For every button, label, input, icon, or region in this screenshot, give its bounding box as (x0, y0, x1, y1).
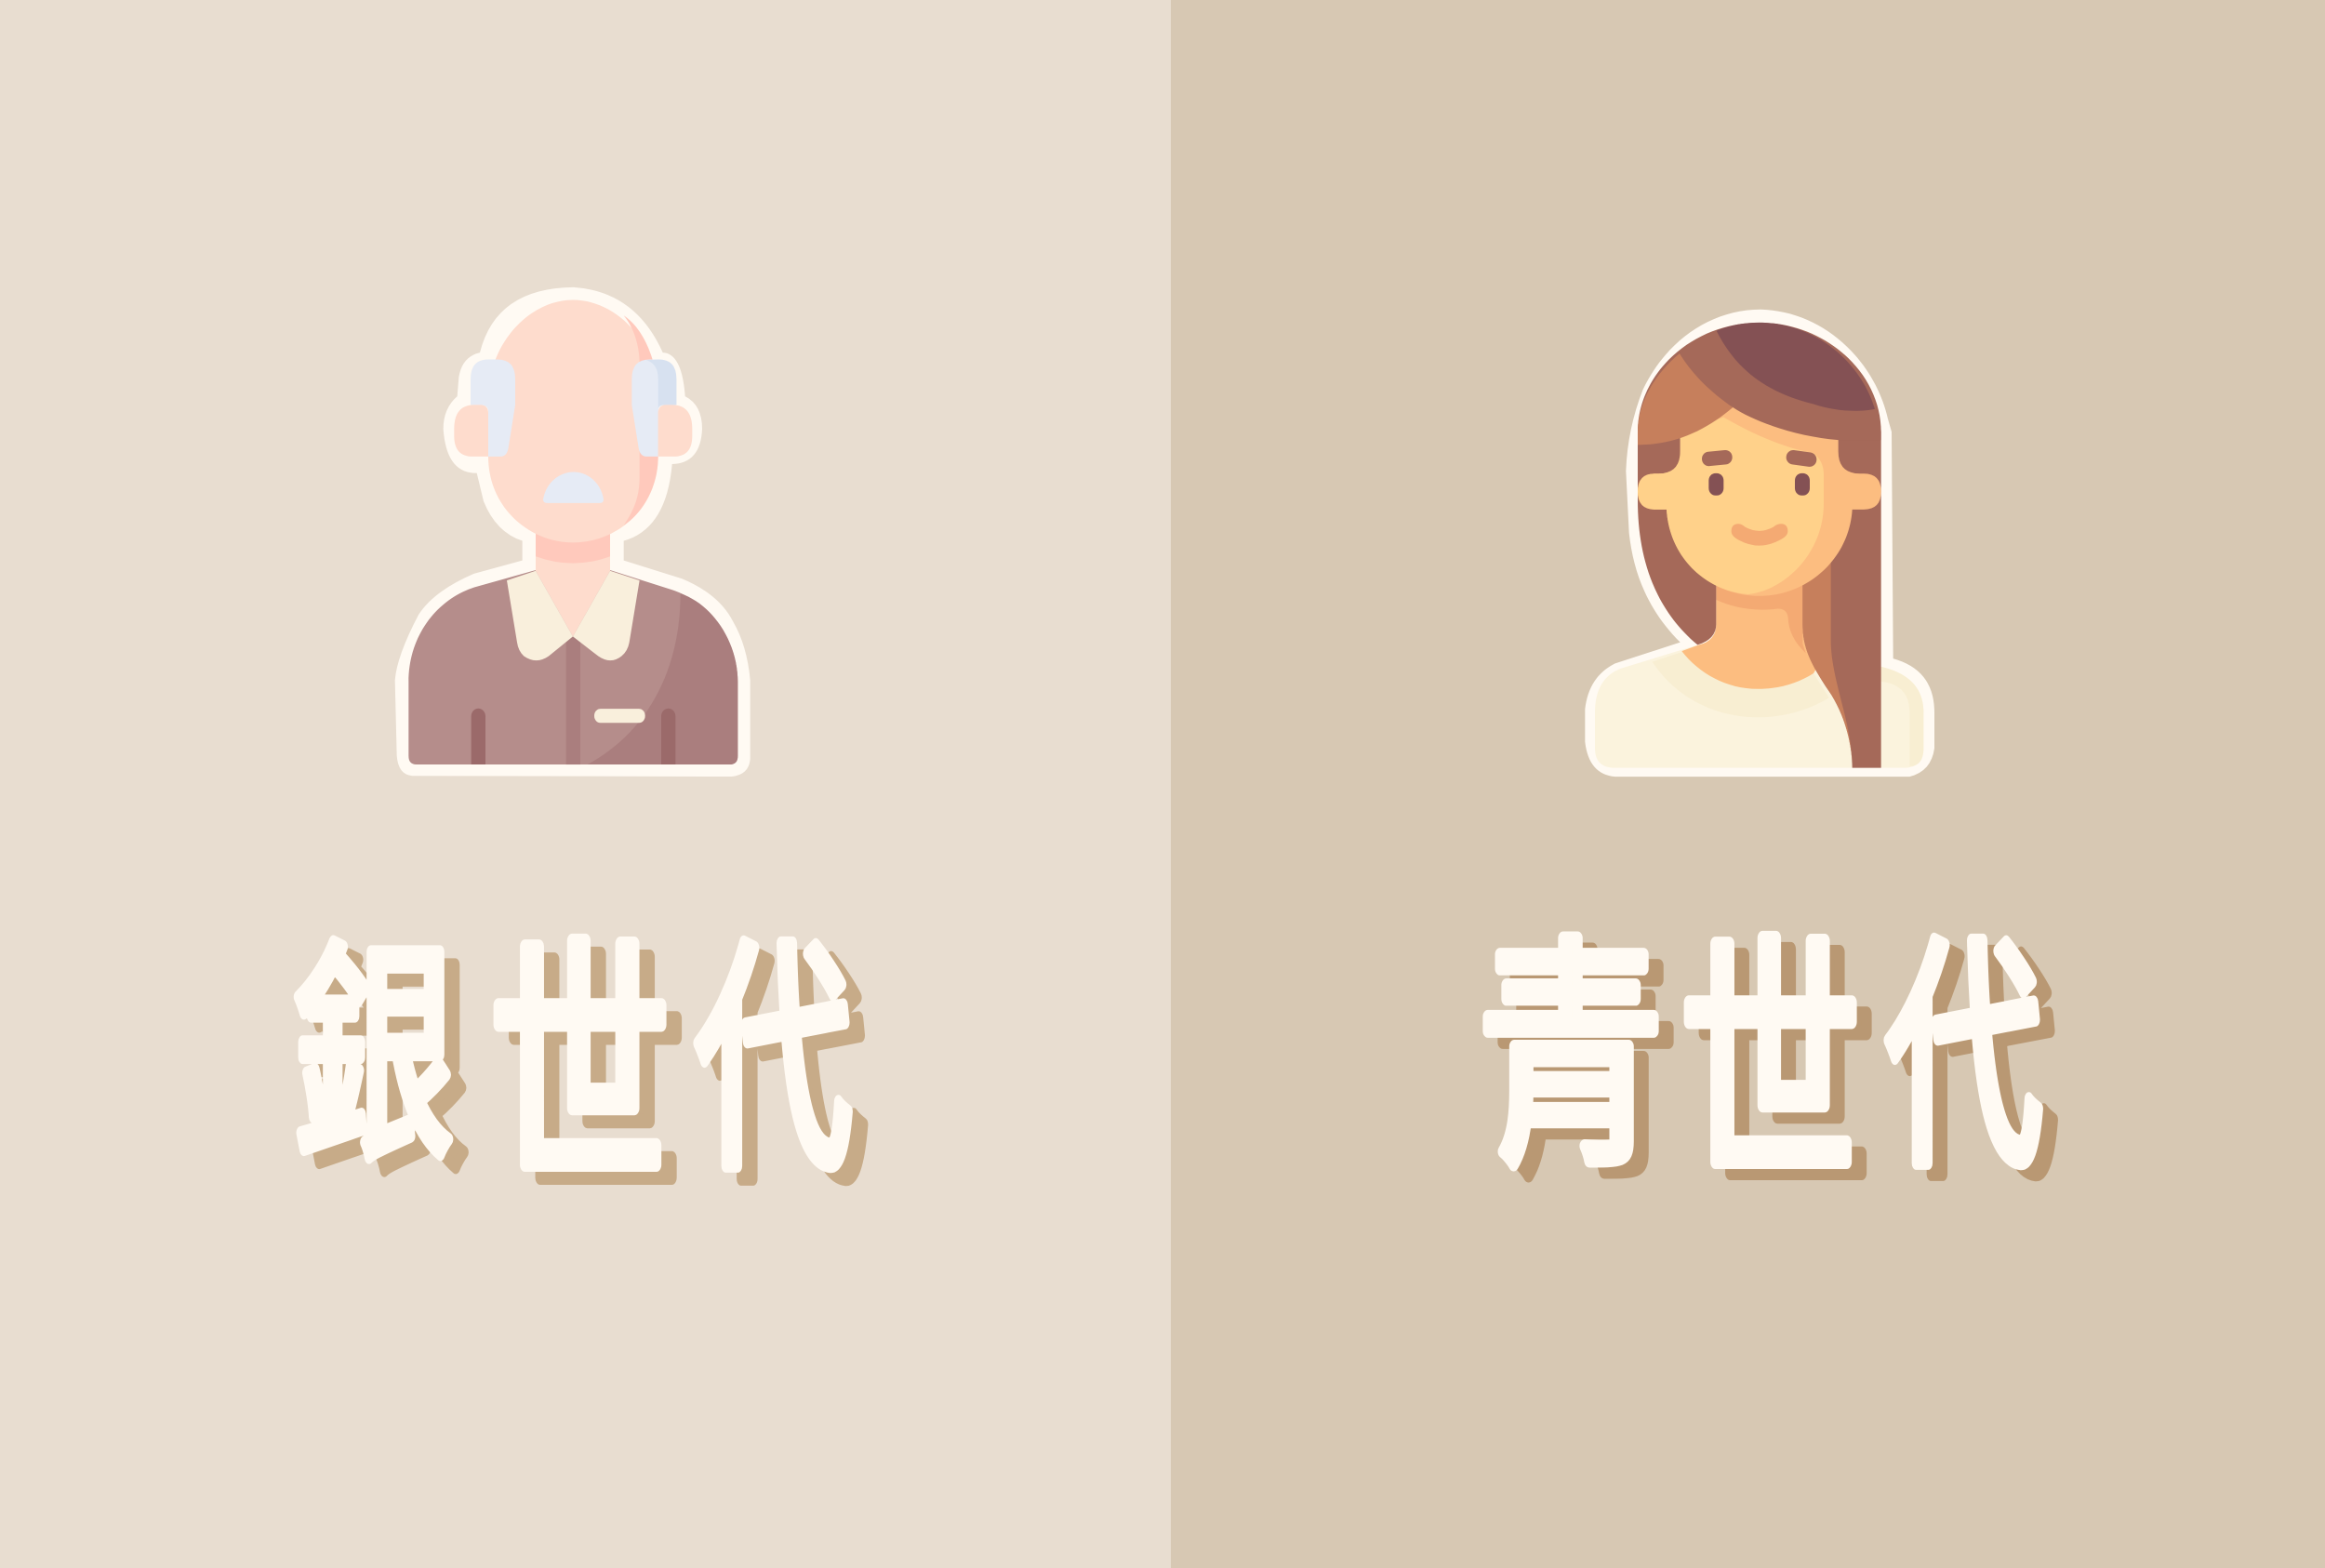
face (1638, 403, 1881, 596)
collar (507, 571, 573, 660)
shirt (1595, 645, 1923, 768)
heading shadow: 青 (1492, 935, 1680, 1205)
heading shadow: 世 (504, 937, 685, 1230)
heading text (1477, 921, 2042, 1215)
heading text: 世 (489, 924, 671, 1217)
head (488, 300, 658, 542)
hair (471, 360, 515, 457)
panel: right background (1171, 0, 2325, 1568)
heading shadow: 銀 (309, 939, 470, 1202)
sticker outline (1585, 310, 1934, 777)
ears (454, 405, 488, 457)
heading: silver generation (293, 924, 868, 1230)
mouth (1732, 524, 1787, 546)
name badge (594, 709, 645, 723)
heading text (293, 924, 852, 1217)
heading text: 青 (1477, 924, 1665, 1194)
neck (536, 529, 610, 636)
eyes (1708, 473, 1723, 496)
neck (1681, 582, 1829, 689)
icon: elderly man (395, 287, 751, 777)
heading text: 代 (694, 924, 852, 1200)
icon: young woman (1585, 310, 1934, 777)
heading: youth generation (1477, 921, 2057, 1226)
heading shadow: 代 (710, 937, 868, 1213)
moustache (543, 472, 604, 503)
panel: left background (0, 0, 1171, 1568)
heading text: 銀 (293, 926, 454, 1189)
long hair (1638, 323, 1881, 768)
pockets (472, 709, 485, 764)
sticker outline (395, 287, 751, 777)
heading shadow: 代 (1899, 933, 2057, 1208)
heading shadow (1492, 932, 2057, 1226)
shirt (408, 570, 737, 764)
heading text: 世 (1680, 921, 1861, 1215)
heading text: 代 (1884, 922, 2042, 1197)
heading shadow: 世 (1694, 932, 1876, 1226)
heading shadow (309, 937, 868, 1230)
fringe (1638, 353, 1733, 445)
